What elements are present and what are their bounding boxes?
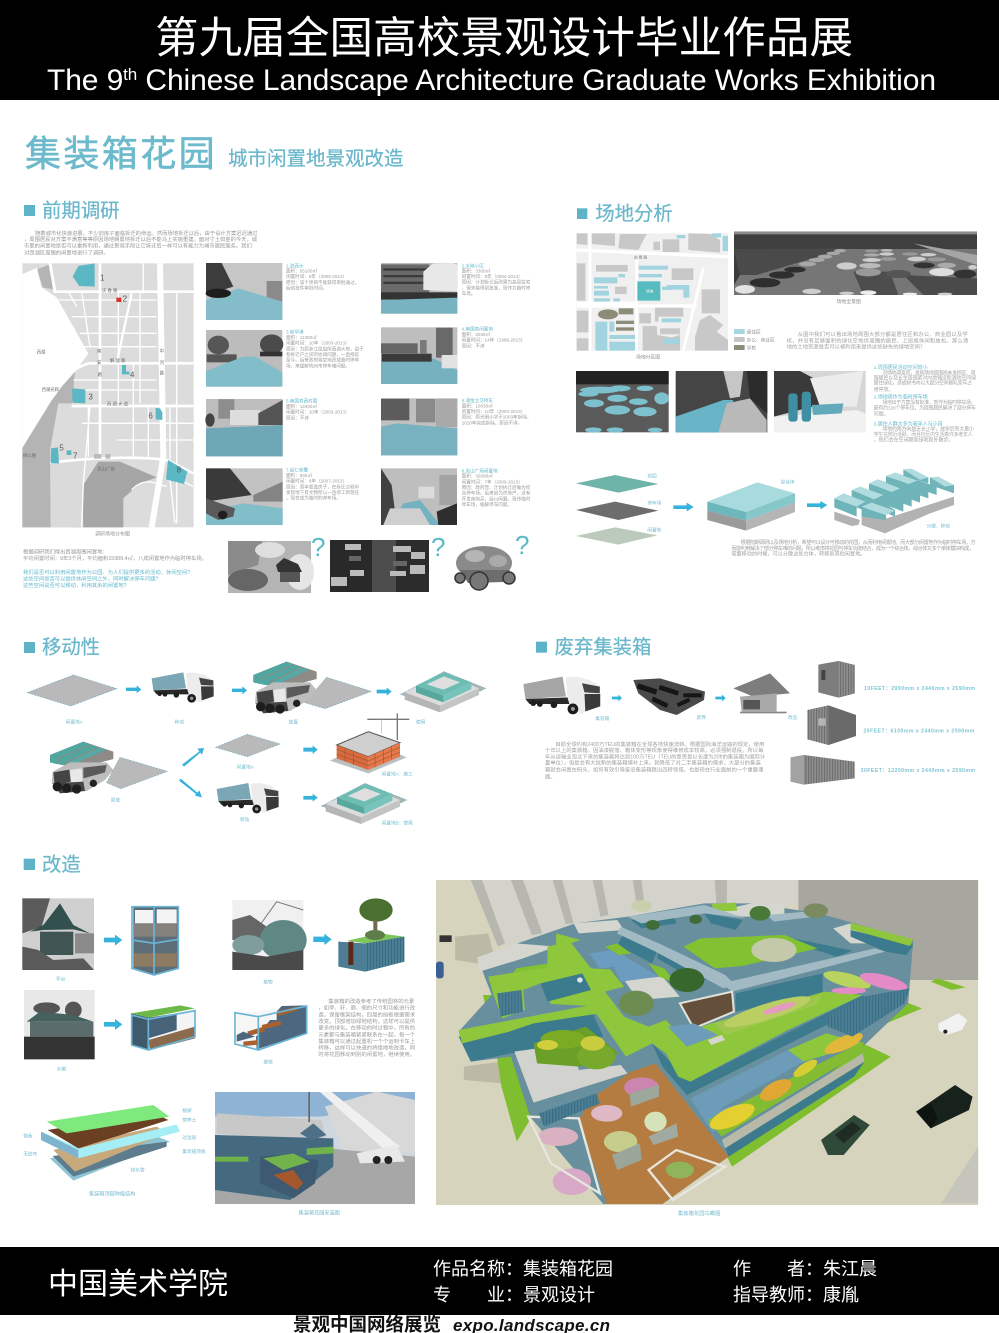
map of research sites: 吴山广场 — [97, 465, 115, 472]
garden on lot B — [322, 783, 407, 824]
container text: 年从运输业淘汰下来的集装箱将达到100万TEU（TEU的意思是以长度为20ft的集装箱为国际计 — [545, 752, 766, 760]
central lawn — [683, 935, 817, 968]
container with stairs — [235, 1005, 307, 1050]
concept explanation text: 需要移动的时候，可以分散这些合体，转移到其他闲置地。 — [731, 550, 865, 558]
heading: preliminary research: 前期调研 — [42, 200, 120, 222]
10ft dimensions: 10FEET：2990mm x 2440mm x 2590mm — [864, 686, 975, 692]
lower lot — [107, 757, 167, 789]
panorama caption: 场地全景图 — [837, 298, 861, 305]
site 5 text: 闲置时间：10年（2003-2013） — [286, 409, 350, 416]
arrow — [104, 1019, 122, 1030]
caption: stairs: 楼梯 — [263, 1059, 273, 1066]
site 8 text: 闲置时间：7年（2006-2013） — [462, 478, 523, 485]
site 8 — [381, 468, 457, 525]
site analysis text: 从图中我们可以看出场地周围大部分都是居住区和办公、商业园以及学 — [798, 330, 968, 338]
lawn strips — [483, 978, 966, 1167]
caption: moved: 到放 — [111, 796, 120, 803]
caption: plants: 植物 — [263, 978, 273, 985]
container text: 箱就会闲置在码头。如何有效引导废旧集装箱跳出四转领域，也是现在行业面前的一个重要课 — [545, 766, 764, 774]
research questions: 这些空间是否可以移动，利用其余的闲置地? — [23, 581, 127, 589]
site 6 text: 原因：原光明小学于2003年拆除， — [462, 414, 531, 421]
work info: 作品名称：集装箱花园 — [433, 1259, 613, 1279]
idle lot A — [27, 675, 117, 706]
question photos — [228, 530, 529, 593]
arrow — [715, 695, 726, 701]
site 5 text: 5.南国寿西村面 — [286, 398, 318, 405]
20ft dimensions: 20FEET：6100mm x 2440mm x 2590mm — [863, 728, 975, 734]
site zoning map: 场地 — [646, 289, 654, 294]
zoning legend: 居住区 — [747, 328, 761, 335]
pale upper decks — [477, 903, 878, 1000]
map of research sites — [22, 263, 194, 527]
yellow bushes — [534, 1027, 619, 1069]
map of research sites: 路 — [98, 371, 103, 378]
work info: 作 者：朱江晨 — [733, 1259, 877, 1279]
container with green roof — [131, 1005, 195, 1050]
transformation text: 集装箱的改造参考了传统园林的元素 — [328, 997, 415, 1005]
grey deck — [514, 1048, 628, 1103]
caption: lot B: 闲置地B：使用 — [382, 820, 413, 827]
site 5 text: 面积：12400㎡ — [286, 403, 317, 410]
site observations text: 居住绿化，造成树书内以大部分空间被轧家车占 — [874, 379, 972, 386]
white car — [938, 1013, 967, 1035]
caption: installation: 集装箱花园安装图 — [299, 1208, 340, 1216]
site observations text: 最有约130个停车位，为周围居民解决了部分停车 — [874, 404, 976, 411]
dark teal walls — [459, 913, 913, 1095]
truck photo — [523, 677, 600, 714]
work info: 指导教师：康胤 — [733, 1285, 859, 1305]
site analysis text: 地的土地资源是否可以被利用来提供这些缺失的绿地空间？ — [787, 343, 925, 351]
layer diagram: 花园 — [647, 472, 657, 479]
transformation text: 造，保留框架结构，四周的挡板根据需求 — [318, 1010, 416, 1018]
map of research sites: 南 — [97, 347, 102, 353]
trees — [619, 900, 828, 1016]
top row captions: 移动 — [175, 718, 184, 725]
concept explanation text: 根据前期调研以及场地分析，希望可以设计可移动的花园，从而利用闲置地。而大部分闲置地作为临时停车场，方 — [741, 538, 976, 546]
site 2 text: 闲置时间：9年（2004-2013） — [462, 273, 523, 280]
heading: transformation — [24, 854, 81, 876]
header banner — [0, 0, 999, 100]
map of research sites: 8 — [177, 466, 182, 475]
site 8 text: 开发商购买，后以闲置。现作临时 — [462, 495, 531, 502]
project title: 集装箱花园 — [25, 133, 217, 174]
site photo list — [205, 262, 531, 525]
panel: disused containers — [523, 636, 975, 785]
site 3 text: 场，来缓解杭州市停车难问题。 — [286, 362, 350, 369]
question marks: ? — [311, 532, 325, 562]
site 3 text: 面积：11300㎡ — [286, 334, 317, 341]
arrow — [232, 686, 247, 694]
parking panorama photo — [734, 232, 977, 295]
transformation text: 时将花园移动到别的闲置地，继续使用。 — [318, 1050, 415, 1058]
site 6 — [381, 398, 457, 455]
structure labels: 营养土 — [182, 1117, 197, 1124]
heading: site analysis: 场地分析 — [595, 203, 673, 225]
deck planters — [528, 1077, 725, 1200]
question marks: ? — [515, 530, 529, 560]
site 1 — [206, 263, 282, 320]
site 6 text: 2010年完成拆除。原因不详。 — [462, 419, 522, 426]
container text: 目前全球约有2400万TEU的集装箱在全球各地快速流转。根据国际海洋运输的规定，使用 — [555, 740, 764, 748]
photo: pavilion — [22, 898, 94, 970]
concept explanation text — [731, 538, 976, 558]
map of research sites: 解 放 路 — [110, 357, 126, 364]
site 4 text: 闲置时间：14年（1999-2013） — [462, 337, 525, 344]
split modules — [834, 469, 954, 533]
structure labels — [23, 1107, 206, 1174]
30ft container — [791, 755, 855, 785]
yellow planting row — [706, 1029, 866, 1157]
transformation text: 元素都与集装箱紧紧联系在一起，每一个 — [318, 1030, 416, 1038]
title: English: th — [123, 65, 137, 84]
map of research sites: 6 — [148, 411, 153, 420]
site observations text: 围居民以及长生周围紧对内地铺设和消防空间绿 — [874, 374, 976, 381]
website line — [293, 1314, 610, 1333]
caption: move: 移动 — [240, 816, 250, 823]
blue courtyard — [589, 950, 659, 982]
map of research sites: 杨公隧 — [23, 452, 37, 459]
blue terrace — [690, 1050, 804, 1147]
concept explanation text: 而能利用解决了部分停车难的问题，所以考虑将花园与停车功能结合，成为一个综合体。综合体又多个单体模块构成， — [731, 544, 974, 552]
site 8 text — [462, 467, 531, 508]
map of research sites: 西湖 — [37, 348, 46, 355]
panel: site analysis — [576, 203, 977, 360]
map caption: 调研场地分布图 — [95, 530, 130, 538]
map of research sites: 4 — [130, 371, 135, 380]
site observations text: ，他们会在空闲期到绿地和外散步。 — [874, 437, 953, 444]
green lawn patches by courtyard — [511, 943, 676, 983]
transformation text: 集装箱可以通过起重机一个个运到卡车上 — [318, 1037, 416, 1045]
transformation text: 更多的绿化。在移动的时过程中，所有的 — [318, 1024, 415, 1032]
site 3 text: 3.新华港 — [286, 329, 304, 336]
structure labels: 排水管 — [131, 1167, 145, 1174]
map of research sites: 河 — [160, 359, 165, 365]
arrow — [313, 934, 332, 945]
upper right flower beds — [822, 968, 909, 994]
crane truck — [253, 662, 317, 714]
site 1 text: 1.滨西大 — [286, 262, 304, 269]
site 2 text: 原因：计划拆迁后改建为高层住宅 — [462, 279, 531, 286]
research intro text: 对西湖区周围的闲置地进行了调研。 — [24, 248, 109, 256]
site 7 text: 7.后仁和覆 — [286, 467, 309, 474]
layer diagram: 闲置地 — [647, 526, 662, 533]
crane truck lifting — [50, 742, 113, 794]
transformation text: 改变。顶部增加绿地结构，这样可以提供 — [318, 1017, 416, 1025]
school name: 中国美术学院 — [48, 1268, 228, 1301]
site 8 text: 8.吴山广场闲置地 — [462, 467, 498, 474]
site zoning map: 庆 春 路 — [634, 255, 647, 260]
arrow — [612, 695, 622, 701]
site 8 text: 停车场，缓解停车问题。 — [462, 501, 512, 508]
heading: transformation: 改造 — [42, 854, 81, 876]
question marks — [311, 530, 529, 562]
site 1 text: 闲置时间：8年（2005-2013） — [286, 273, 347, 280]
upper green roofs — [556, 903, 913, 948]
site observations text: 学生在附近活跃，而且社区内生活着许多老年人 — [874, 431, 973, 438]
site observations text: 场地出于方案没有批准，暂作为临时停车场， — [882, 399, 976, 406]
site analysis text: 校，并没有足够面积的绿化空地供周围的居民、上班族休闲和放松。那么场 — [787, 336, 968, 344]
map of research sites: 西 湖 大 道 — [107, 400, 129, 407]
site 3 text: 原因：为原浙江昆虫所西湖大地，由于 — [286, 345, 364, 352]
arrow — [377, 687, 392, 696]
site observations text: 1.周围居民活动空间较小 — [874, 364, 928, 371]
site 1 text: 原因：该个项目不能获得审批通过， — [286, 279, 359, 286]
panel: transformation — [22, 854, 416, 1216]
site 5 text — [286, 398, 350, 421]
site 7 text: 发现地下有文物所以一直停工到现在 — [286, 489, 360, 496]
structure labels: 集装箱顶板 — [182, 1148, 206, 1155]
caption: roof structure: 集装箱顶部种植结构 — [89, 1190, 135, 1198]
map of research sites: 西湖光辉 — [42, 386, 60, 393]
heading: disused containers: 废弃集装箱 — [555, 636, 651, 658]
photo: plant and rock — [232, 900, 307, 970]
zoning legend — [734, 328, 775, 351]
site observations text: 场地的南方向是天长小学，放学后有大量小 — [882, 426, 974, 433]
site 7 text: ，现在成为临时的停车场。 — [286, 495, 341, 502]
site 2 text: ，但未能得到批准，现作为临时停 — [462, 284, 531, 291]
caption: hall: 水榭 — [57, 1066, 66, 1073]
truck moving — [217, 783, 279, 813]
long flower bed — [715, 991, 823, 1035]
combined volume block — [707, 479, 795, 531]
arrow — [104, 935, 122, 946]
panel: mobility — [24, 637, 486, 827]
site 7 text: 原因：原本要盖房子，在拆迁过程中 — [286, 483, 360, 490]
ground and buildings — [436, 880, 978, 1205]
20ft container — [807, 705, 856, 745]
heading: mobility: 移动性 — [42, 637, 100, 659]
site 6 text: 6.浦金立交桥东 — [462, 397, 493, 404]
map of research sites: 2 — [123, 294, 128, 303]
aerial view of container garden — [436, 880, 978, 1205]
caption: aerial: 集装箱花园鸟瞰图 — [678, 1209, 720, 1217]
footer — [0, 1247, 999, 1315]
transformation text — [318, 997, 416, 1058]
map of research sites: 路 — [160, 369, 165, 376]
arrow — [807, 501, 827, 509]
structure labels: 过滤层 — [182, 1134, 197, 1141]
site 2 text: 车场。 — [462, 290, 475, 297]
site 3 text: 和拆迁户之间的协调问题，一直拖延 — [286, 351, 360, 358]
photo: lane highlighted — [676, 371, 767, 432]
roof opening — [541, 973, 591, 1002]
container text: 量单位），但是会有大批新的集装箱填补上来，就降低了对二手集装箱的需求，大部分的集装 — [545, 759, 761, 767]
construction on lot A — [330, 713, 409, 773]
work info — [433, 1259, 877, 1305]
research intro text — [24, 229, 258, 256]
site 1 text: 面积：55100㎡ — [286, 268, 317, 275]
site 7 text: 面积：840㎡ — [286, 472, 312, 479]
site 6 text: 闲置时间：10年（2003-2013） — [462, 408, 525, 415]
site 7 text — [286, 467, 360, 502]
photo: garden — [228, 541, 314, 593]
30ft dimensions: 30FEET：12200mm x 2440mm x 2590mm — [861, 768, 975, 774]
title: English: The 9 — [47, 64, 123, 97]
site 6 text: 面积：10030㎡ — [462, 402, 493, 409]
map of research sites: 庆 春 路 — [102, 287, 118, 294]
research intro text: 市里的闲置地是否可以重新利用，通过景观手段让它拆迁后一样可以有能力为城市居民服务。我们 — [24, 242, 252, 250]
arrow — [303, 745, 318, 754]
site 7 — [206, 468, 283, 525]
zoning legend: 办公、商业区 — [747, 336, 775, 343]
work info: 专 业：景观设计 — [433, 1285, 595, 1305]
captions — [595, 714, 798, 722]
container text — [545, 740, 766, 780]
title: Chinese: 第九届全国高校景观设计毕业作品展 — [155, 15, 853, 63]
site 4 text: 4.南国寿闲置地 — [462, 326, 493, 333]
transformation text: 转移，这样可以快速的将绝地地改造，同 — [318, 1043, 415, 1051]
idle lot A — [216, 734, 280, 757]
split modules: 分散、移动 — [927, 523, 950, 530]
site 3 text — [286, 329, 364, 369]
site 4 text: 面积：2045㎡ — [462, 331, 491, 338]
zoning map caption: 场地分区图 — [636, 353, 660, 360]
site 2 text — [462, 262, 531, 297]
container pile — [633, 678, 705, 715]
photo: waterside hall — [24, 990, 95, 1059]
arrow — [303, 794, 318, 802]
zoning legend: 学校 — [747, 344, 756, 351]
site zoning map — [576, 233, 728, 351]
photo: parking lot — [330, 540, 429, 592]
site analysis text — [787, 330, 968, 351]
question marks: ? — [431, 532, 445, 562]
site 4 text — [462, 326, 525, 349]
site observations text: 2.场地现作为临时停车场 — [874, 394, 928, 401]
arrow down — [179, 779, 202, 797]
site observations text: 3.居住人群大多为老年人与小孩 — [874, 420, 943, 427]
layer diagram: 停车场 — [647, 499, 662, 506]
title: English: Chinese Landscape Architecture Graduate Works Exhibition — [137, 64, 936, 97]
site observations text: 问题。 — [874, 410, 889, 417]
structure labels: 侧板 — [23, 1132, 33, 1139]
converted container — [733, 673, 790, 713]
site observations text — [874, 364, 976, 444]
caption: construction: 闲置地A：施工 — [382, 770, 413, 777]
site 3 text: 至今。后来政府将空地改成临时停车 — [286, 357, 360, 364]
site 8 text: 原因：政府曾、计划拆迁后做为综 — [462, 484, 531, 491]
dark green car — [821, 1115, 870, 1155]
photo: flower cart — [455, 546, 515, 590]
container text: 十年以上的集装箱，因油漆脱落、箱体变形等现象使得维修成本较高，必须强制退役。所以每 — [545, 746, 764, 754]
research questions — [23, 568, 190, 589]
site 8 text: 合停车场。后来因为房地产，没有 — [462, 490, 531, 497]
truck moving — [152, 672, 214, 703]
site 7 text: 闲置时间：6年（2007-2013） — [286, 478, 347, 485]
container planter — [338, 898, 404, 972]
map of research sites: 中 — [160, 347, 164, 354]
combined volume block: 综合体 — [781, 479, 795, 486]
arrow — [673, 503, 694, 511]
map of research sites: 7 — [73, 451, 78, 460]
layer diagram — [576, 472, 662, 545]
captions: 改造 — [788, 714, 798, 721]
map of research sites: 安 — [97, 359, 102, 366]
photo: parked cars highlighted — [576, 371, 669, 433]
structure labels: 植被 — [182, 1107, 192, 1114]
map of research sites: 1 — [100, 274, 105, 283]
10ft container — [818, 661, 855, 698]
garden in use — [401, 672, 486, 712]
timber deck — [579, 1063, 729, 1204]
research findings: 根据调研我们得出西湖周围闲置地： — [23, 548, 108, 556]
arrow — [126, 685, 141, 693]
structure labels: 无纺布 — [23, 1150, 38, 1157]
map of research sites: 5 — [59, 444, 64, 453]
site 3 text: 闲置时间：10年（2003-2013） — [286, 340, 350, 347]
caption: pavilion: 亭台 — [56, 976, 66, 983]
site 8 text: 面积：32000㎡ — [462, 473, 493, 480]
captions: 集装箱 — [595, 715, 610, 722]
side wall container — [497, 990, 523, 1017]
top row captions: 闲置地A — [66, 718, 84, 725]
research intro text: 随着城市化快速进展，不少旧房子面临拆迁的命运。然而场地拆迁以后，由于设计方案迟迟通过 — [35, 229, 258, 237]
installation render — [215, 1092, 415, 1204]
research findings: 平均闲置时间：9年3个月，平均面积15989.4㎡，八成闲置地作为临时停车场。 — [23, 554, 207, 562]
research findings — [23, 548, 207, 562]
container text: 题。 — [545, 773, 556, 780]
top row captions: 放置 — [289, 718, 298, 725]
research questions: 这些空间是否可以提供休闲空间之外，同时解决停车问题? — [23, 574, 158, 582]
top row captions — [66, 718, 426, 725]
panel: preliminary research — [22, 200, 531, 593]
site 2 — [381, 263, 457, 314]
site 1 text: 后动批件审批时间。 — [286, 285, 327, 292]
site observations text: 对场地调查后，发现场地周围尚未发校区、周 — [882, 369, 976, 376]
site 4 — [381, 327, 457, 384]
base structure — [459, 903, 913, 1204]
caption: lot A: 闲置地A — [237, 763, 255, 770]
arrow up — [182, 748, 204, 767]
site 6 text — [462, 397, 531, 426]
site 2 text: 面积：3300㎡ — [462, 268, 491, 275]
research intro text: ，周围居民对方案不满意等等原因场地搁置地拆迁以后不能马上实施重建。面对寸土如金的今天，城 — [24, 235, 258, 243]
roof layer structure — [41, 1105, 180, 1181]
steps pergola — [668, 992, 734, 1047]
site 4 text: 原因：不详 — [462, 342, 485, 349]
black van — [916, 1085, 973, 1128]
panel: site photos and diagrams — [576, 364, 976, 558]
site 2 text: 2.水映小区 — [462, 262, 484, 269]
site 3 — [206, 330, 283, 387]
top row captions: 使用 — [416, 718, 426, 725]
captions: 废弃 — [697, 714, 706, 721]
photo: people highlighted — [774, 371, 866, 432]
lot being unloaded — [305, 677, 371, 709]
side container walls — [539, 988, 910, 1127]
upper walkways — [617, 905, 885, 992]
project subtitle: 城市闲置地景观改造 — [228, 148, 404, 170]
site 5 — [205, 399, 283, 456]
site observations text: 用停放。 — [874, 386, 894, 393]
map of research sites: 3 — [88, 392, 93, 401]
main green roof network — [459, 942, 865, 1082]
container frame two levels — [132, 907, 178, 975]
research questions: 我们是否可以利用闲置地作为公园、为人们提供更多的活动、休闲空间? — [23, 568, 190, 576]
site 5 text: 原因：不详 — [286, 414, 309, 421]
site 1 text — [286, 262, 359, 292]
transformation text: ，如亭、轩、廊、阁的尺寸和功能进行改 — [318, 1004, 416, 1012]
